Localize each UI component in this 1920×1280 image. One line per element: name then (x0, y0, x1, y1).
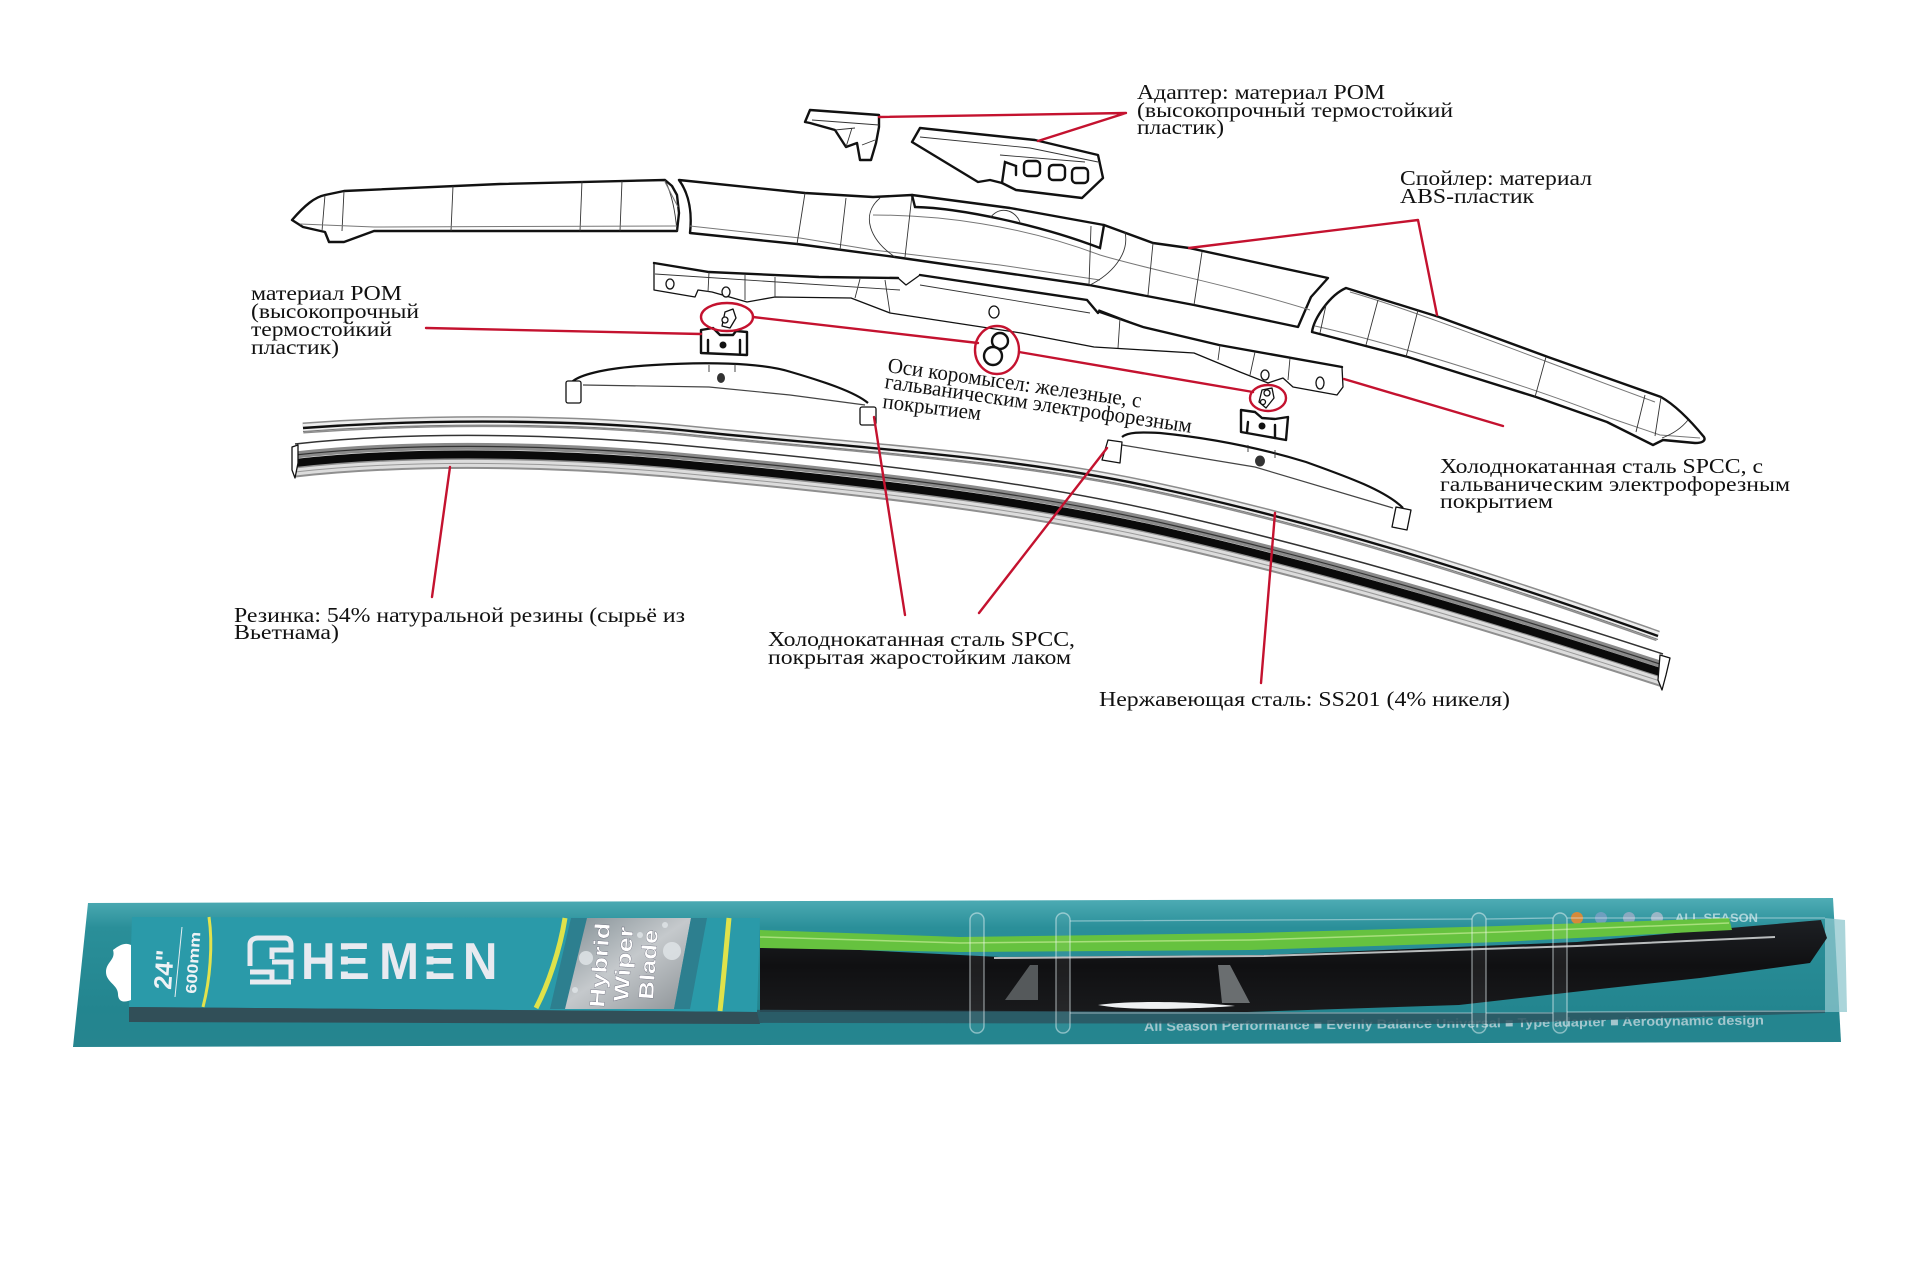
photo strip with water drops (557, 918, 691, 1009)
metal frame (654, 263, 1343, 395)
blister loops (970, 913, 1825, 1033)
rail over card (129, 1007, 760, 1024)
gaps that split the E letters into bars (339, 950, 438, 972)
lower rail (129, 1007, 1825, 1024)
label: POM material: (высокопрочный (251, 299, 419, 323)
label: cold rolled steel with electrophoretic coating (1440, 454, 1790, 513)
brand name: HEMEN (301, 932, 497, 990)
label: rocker axles, rotated: Оси коромысел: железные, с (886, 353, 1143, 413)
red leader lines (426, 113, 1503, 683)
icon row: all season (1571, 912, 1663, 924)
label: spoiler: Спойлер: материал (1400, 166, 1592, 190)
chrome strip (994, 937, 1775, 958)
wiper body (760, 920, 1827, 1012)
feature list text: All Season Performance ■ Evenly Balance Universal ■ Type adapter ■ Aerodynamic design (1144, 1013, 1764, 1034)
water drops (572, 922, 681, 993)
label: cold rolled steel with heat resistant lacquer: покрытая жаростойким лаком (768, 645, 1071, 669)
paper insert card (106, 917, 760, 1012)
label: adapter: пластик) (1137, 115, 1224, 139)
right pin and clip (1241, 388, 1288, 440)
lighter plastic edge (1825, 918, 1847, 1012)
label: stainless steel: Нержавеющая сталь: SS201 (4% никеля) (1099, 687, 1510, 711)
label: spoiler (1400, 166, 1592, 208)
size divider (175, 927, 182, 997)
yellow stripes (536, 918, 729, 1011)
paper insert card: Blade (635, 929, 663, 1000)
chrome highlight (1098, 1002, 1235, 1009)
label: rubber: Вьетнама) (234, 620, 339, 644)
all season text: ALL SEASON (1675, 911, 1758, 925)
label: cold rolled steel with electrophoretic coating: Холоднокатанная сталь SPCC, с (1440, 454, 1763, 478)
centre pin (984, 333, 1008, 365)
label: POM material: пластик) (251, 335, 339, 359)
small adapter clip (805, 110, 879, 160)
label: POM material (251, 281, 419, 359)
metric size text: 600mm (183, 931, 204, 994)
right arm (1102, 432, 1411, 530)
label: adapter (1137, 80, 1453, 139)
panel: packaged wiper blade (73, 898, 1847, 1047)
label: rocker axles, rotated: гальваническим электрофорезным (883, 369, 1194, 438)
label: cold rolled steel with electrophoretic coating: покрытием (1440, 489, 1553, 513)
large adapter (912, 128, 1103, 198)
label: POM material: термостойкий (251, 317, 392, 341)
backing card (73, 898, 1841, 1047)
right spoiler section (1312, 288, 1705, 445)
diagram: exploded wiper blade (292, 110, 1705, 690)
rubber blade and steel rails (292, 422, 1670, 690)
hanger slot (106, 944, 131, 1002)
label: cold rolled steel with heat resistant lacquer: Холоднокатанная сталь SPCC, (768, 627, 1075, 651)
label: POM material: материал POM (251, 281, 402, 305)
left pin and clip (701, 309, 747, 355)
centre wings (1005, 965, 1250, 1003)
label: rocker axles, rotated: покрытием (881, 389, 983, 425)
logo icon (250, 938, 291, 982)
label: adapter: (высокопрочный термостойкий (1137, 98, 1453, 122)
size text: 24" (149, 949, 180, 990)
label: cold rolled steel with heat resistant lacquer (768, 627, 1075, 669)
central spoiler section (679, 180, 1328, 327)
label: rubber (234, 603, 685, 644)
label: rubber: Резинка: 54% натуральной резины (сырьё из (234, 603, 685, 627)
green insert (760, 918, 1732, 952)
label: spoiler: ABS-пластик (1400, 184, 1535, 208)
left arm (566, 363, 876, 425)
product name: Hybrid (586, 922, 615, 1008)
paper insert card: Wiper (610, 926, 638, 1002)
left spoiler section (292, 180, 679, 242)
label: cold rolled steel with electrophoretic coating: гальваническим электрофорезным (1440, 472, 1790, 496)
label: adapter: Адаптер: материал POM (1137, 80, 1385, 104)
yellow stripe (203, 917, 211, 1007)
